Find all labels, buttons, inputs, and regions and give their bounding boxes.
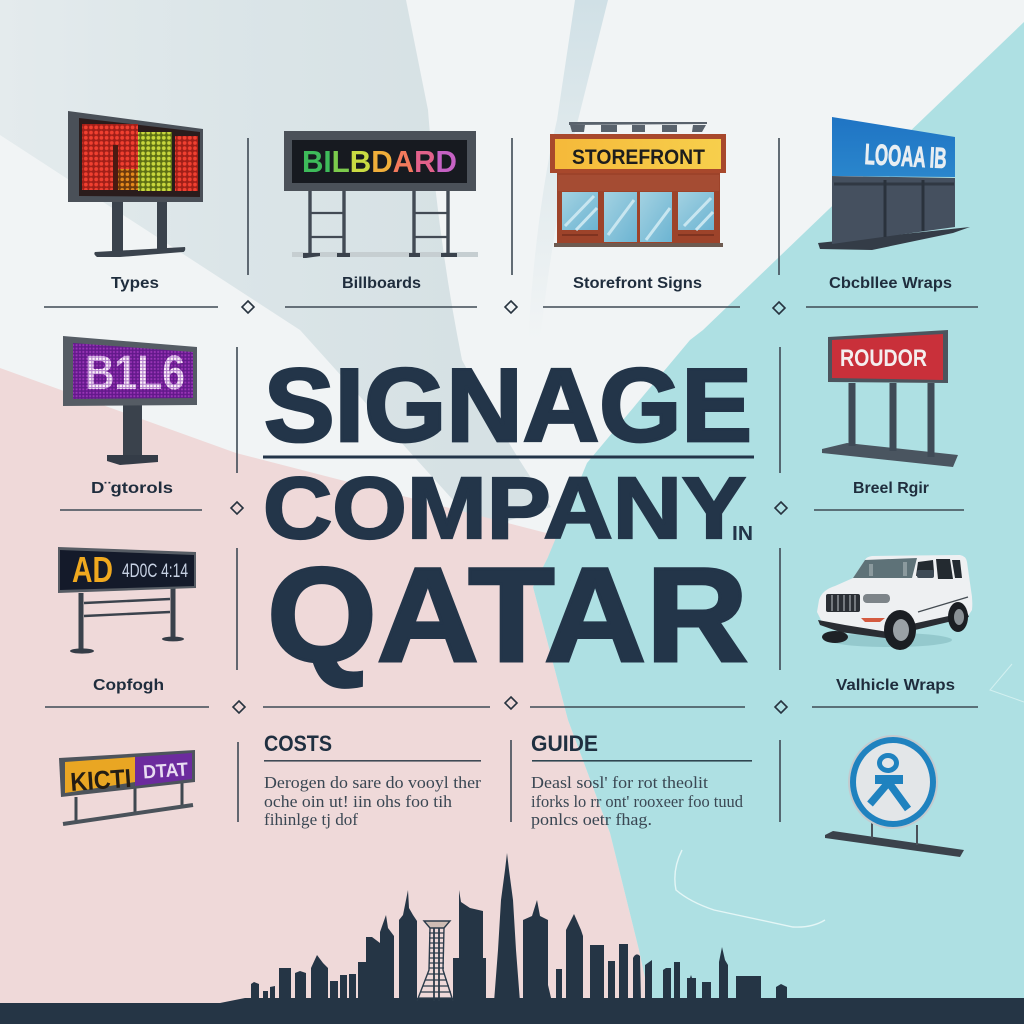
icon: AD display — [58, 547, 196, 654]
body text: costs: oche oin ut! iin ohs foo tih — [264, 792, 453, 811]
skyline of Doha — [0, 853, 1024, 1024]
panel: small sign — [59, 750, 195, 824]
panel: guide — [531, 731, 752, 829]
panel: types — [68, 111, 203, 292]
heading rule — [532, 760, 752, 762]
sign text: ROUDOR — [840, 345, 927, 372]
sign text: STOREFRONT — [572, 146, 705, 169]
body text: guide: Deasl sosl' for rot theolit — [531, 773, 708, 792]
icon: white SUV — [817, 555, 972, 650]
panel: storefront signs — [550, 122, 726, 292]
icon: two-colour sign — [59, 750, 195, 824]
icon: billboard — [284, 131, 478, 258]
sign text small: 4D0C 4:14 — [122, 561, 188, 582]
panel: vehicle wraps — [817, 555, 972, 694]
heading rule — [264, 760, 481, 762]
icon: storefront — [550, 122, 726, 247]
sign text right: DTAT — [142, 759, 189, 784]
body text: guide: ponlcs oetr fhag. — [531, 810, 652, 829]
body text: costs — [264, 773, 482, 829]
sign text: AD — [72, 549, 113, 590]
panel: digital signs — [63, 336, 197, 497]
panel: billboards — [284, 131, 478, 292]
panel: copyright sign — [58, 547, 196, 694]
label: types: Types — [111, 275, 159, 292]
heading: costs: COSTS — [264, 731, 332, 756]
sign text: BILBDARD — [302, 144, 457, 179]
label: cable wraps: Cbcbllee Wraps — [829, 275, 952, 292]
panel: costs — [264, 731, 482, 829]
title line: company: COMPANY — [263, 460, 746, 557]
label: outdoor signs: Breel Rgir — [853, 480, 929, 497]
label: copyright sign: Copfogh — [93, 677, 164, 694]
title line: signage: SIGNAGE — [264, 348, 752, 464]
body text: costs: fihinlge tj dof — [264, 810, 359, 829]
label: storefront signs: Storefront Signs — [573, 275, 702, 292]
sign text left: KICTI — [69, 763, 132, 797]
body text: guide — [531, 773, 744, 829]
body text: guide: iforks lo rr ont' rooxeer foo tuud — [531, 792, 744, 811]
icon: round person sign — [825, 735, 964, 857]
lattice tower — [417, 921, 453, 1001]
sign text: B1L6 — [85, 347, 185, 400]
icon: digital display — [63, 336, 197, 465]
panel: cable wraps — [818, 117, 970, 292]
title word: in: IN — [732, 523, 753, 545]
sign text: LOOAA IB — [864, 139, 947, 175]
title rule — [263, 456, 754, 458]
icon: monument sign — [818, 117, 970, 250]
icon: red sign — [822, 330, 958, 467]
main title — [263, 348, 754, 690]
title line: qatar: QATAR — [267, 541, 748, 690]
label: billboards: Billboards — [342, 275, 421, 292]
panel: outdoor signs — [822, 330, 958, 497]
grid dividers — [44, 138, 978, 822]
icon: LED board — [68, 111, 203, 257]
label: vehicle wraps: Valhicle Wraps — [836, 677, 955, 694]
body text: costs: Derogen do sare do vooyl ther — [264, 773, 482, 792]
heading: guide: GUIDE — [531, 731, 598, 756]
label: digital signs: D¨gtorols — [91, 480, 173, 497]
